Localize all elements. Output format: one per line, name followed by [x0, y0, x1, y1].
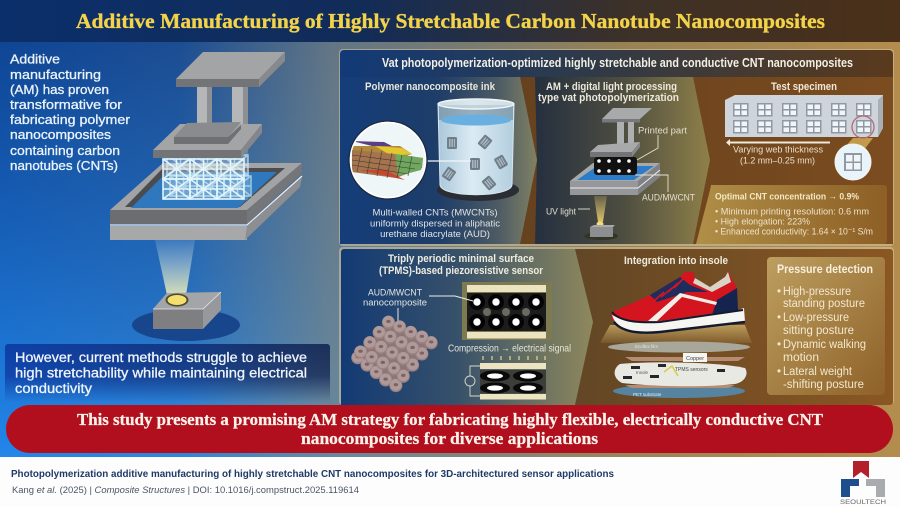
title bar — [0, 0, 900, 42]
composite label — [363, 288, 427, 308]
optimal concentration box — [696, 185, 887, 244]
small printer — [570, 108, 660, 240]
section backgrounds — [341, 249, 893, 405]
copper layer — [625, 357, 745, 388]
heading: tpms: Triply periodic minimal surface — [388, 253, 534, 265]
optimal concentration box: • Minimum printing resolution: 0.6 mm — [715, 206, 869, 218]
copper label — [683, 353, 707, 362]
pet layer: PET substrate — [633, 392, 662, 397]
pressure detection box: -shifting posture — [783, 379, 864, 391]
pressure detection box: standing posture — [783, 298, 865, 310]
heading: dlp: type vat photopolymerization — [538, 92, 679, 104]
title: Additive Manufacturing of Highly Stretchable Carbon Nanotube Nanocomposites — [76, 9, 825, 33]
intro text — [10, 52, 131, 173]
ink caption: uniformly dispersed in aliphatic — [370, 218, 500, 230]
tpms lattice — [351, 316, 438, 392]
footer — [0, 457, 900, 507]
limitation callout: high stretchability while maintaining electrical — [15, 366, 307, 380]
limitation callout: conductivity — [15, 381, 92, 396]
insole layers — [608, 342, 750, 398]
heading: insole: Integration into insole — [624, 255, 728, 267]
panel: vat photopolymerization: Printed part — [638, 126, 687, 136]
uv source block — [132, 292, 240, 341]
panel: vat photopolymerization: UV light — [546, 206, 576, 218]
columns — [197, 87, 248, 125]
conclusion banner — [6, 405, 893, 453]
shoe projection — [600, 325, 752, 343]
pressure detection box: Low-pressure — [783, 312, 849, 324]
printer labels — [578, 135, 668, 209]
circuit symbol — [465, 366, 480, 396]
pressure detection box: • — [777, 286, 781, 298]
web thickness caption: Varying web thickness — [733, 144, 823, 156]
pressure detection box: Dynamic walking — [783, 339, 866, 351]
test specimen — [725, 95, 883, 180]
web thickness arrow — [726, 139, 830, 146]
optimal concentration box: Optimal CNT concentration → 0.9% — [715, 192, 859, 202]
ink caption: urethane diacrylate (AUD) — [380, 229, 490, 240]
pressure detection box — [767, 257, 885, 395]
heading: dlp — [538, 81, 679, 104]
pressure detection box: Lateral weight — [783, 366, 853, 378]
intro text: (AM) has proven — [10, 82, 109, 97]
intro text: nanotubes (CNTs) — [10, 158, 118, 173]
intro text: containing carbon — [10, 143, 120, 158]
panel: vat photopolymerization: AUD/MWCNT — [642, 192, 695, 204]
compression arrows — [483, 356, 545, 360]
pressure detection box: • — [777, 312, 781, 324]
beaker — [437, 99, 519, 201]
intro text: manufacturing — [10, 67, 101, 82]
composite label: nanocomposite — [363, 298, 427, 308]
pressure detection box: • — [777, 339, 781, 351]
seoultech logo: SEOULTECH — [840, 499, 886, 506]
panel: tpms sensor and insole — [339, 247, 894, 405]
seoultech logo — [840, 461, 886, 506]
ecoflex layer: Ecoflex film — [635, 344, 658, 349]
vat — [110, 163, 302, 240]
intro text: nanocomposites — [10, 127, 112, 142]
pet layer — [613, 384, 745, 398]
heading: polymer ink: Polymer nanocomposite ink — [365, 81, 496, 93]
panel heading — [340, 50, 893, 77]
pressure detection box: Pressure detection — [777, 264, 873, 276]
compressed section — [480, 363, 546, 400]
ink caption: Multi-walled CNTs (MWCNTs) — [372, 208, 498, 218]
conclusion banner: This study presents a promising AM strategy for fabricating highly flexible, electrically conductive CNT — [77, 410, 824, 429]
pressure detection box: motion — [783, 352, 819, 364]
printed lattice — [163, 150, 251, 200]
copper label: Copper — [686, 356, 704, 362]
limitation callout — [5, 344, 330, 402]
uv beam — [155, 240, 195, 295]
section backgrounds — [340, 77, 893, 244]
top plate — [176, 52, 285, 87]
intro text: Additive — [10, 52, 60, 66]
optimal concentration box: • Enhanced conductivity: 1.64 × 10⁻¹ S/m — [715, 226, 873, 238]
citation title: Photopolymerization additive manufacturing of highly stretchable CNT nanocomposites for 3D-architectured sensor applications — [11, 469, 614, 480]
ecoflex layer — [608, 342, 750, 352]
uncompressed section — [462, 282, 552, 340]
heading: tpms — [379, 253, 544, 277]
intro text: fabricating polymer — [10, 112, 131, 127]
compression label: Compression → electrical signal — [448, 344, 571, 354]
pressure detection box: • — [777, 366, 781, 378]
panel: vat photopolymerization — [339, 49, 894, 246]
pressure detection box: sitting posture — [783, 325, 854, 337]
heading: dlp: AM + digital light processing — [546, 81, 677, 93]
printed part — [594, 157, 637, 175]
web thickness caption: (1.2 mm–0.25 mm) — [740, 156, 815, 166]
optimal concentration box: • High elongation: 223% — [715, 216, 811, 228]
ink caption — [370, 208, 500, 240]
cnt magnifier — [349, 121, 427, 199]
pressure detection box: High-pressure — [783, 286, 851, 298]
conclusion banner: nanocomposites for diverse applications — [301, 429, 598, 448]
composite label: AUD/MWCNT — [368, 288, 422, 298]
limitation callout: However, current methods struggle to achieve — [15, 350, 307, 365]
heading: tpms: (TPMS)-based piezoresistive sensor — [379, 265, 544, 277]
insole layer: TPMS sensors — [675, 367, 708, 373]
connector line — [427, 160, 471, 162]
insole layer: Insole — [636, 370, 649, 375]
heading: test specimen: Test specimen — [771, 81, 837, 93]
citation details: Kang et al. (2025) | Composite Structures | DOI: 10.1016/j.compstruct.2025.119614 — [12, 485, 359, 496]
main printer illustration — [110, 52, 302, 341]
intro text: transformative for — [10, 97, 123, 112]
shoe — [612, 272, 745, 333]
insole layer — [615, 362, 747, 386]
build plate — [153, 122, 262, 158]
web thickness caption — [733, 144, 823, 166]
